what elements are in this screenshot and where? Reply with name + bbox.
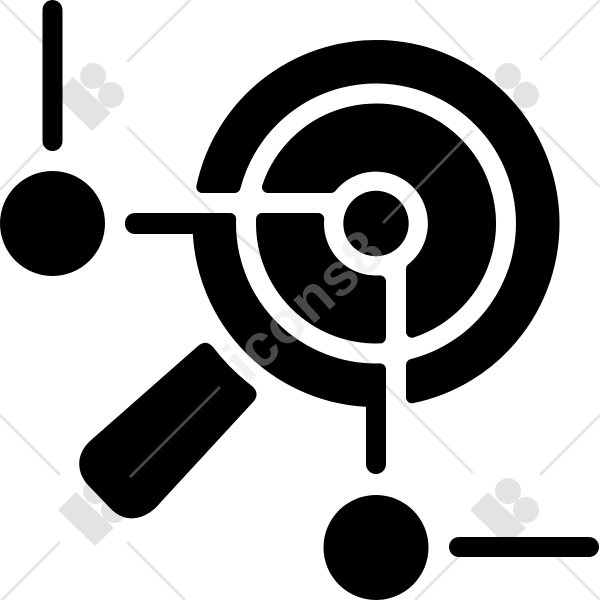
- icon: target centre dot: [343, 191, 409, 256]
- watermark: centre wordmark and diagonal lines over the icon: icons8: [211, 217, 397, 394]
- icon: bottom-right horizontal bar: [449, 537, 599, 557]
- icon: outer ring lower left with connector bars: [125, 213, 386, 474]
- icon: inner target sector lower left: [262, 219, 380, 337]
- watermark: light cross lines and logos: icons8: [211, 217, 397, 394]
- icon: magnifier handle: [79, 343, 257, 518]
- icon: outer target ring arc: [202, 46, 554, 397]
- icon: left node circle: [0, 171, 105, 276]
- icon: top-left vertical bar: [42, 0, 62, 151]
- icon: inner target sector upper right: [268, 110, 490, 332]
- icon: bottom node circle: [324, 495, 428, 600]
